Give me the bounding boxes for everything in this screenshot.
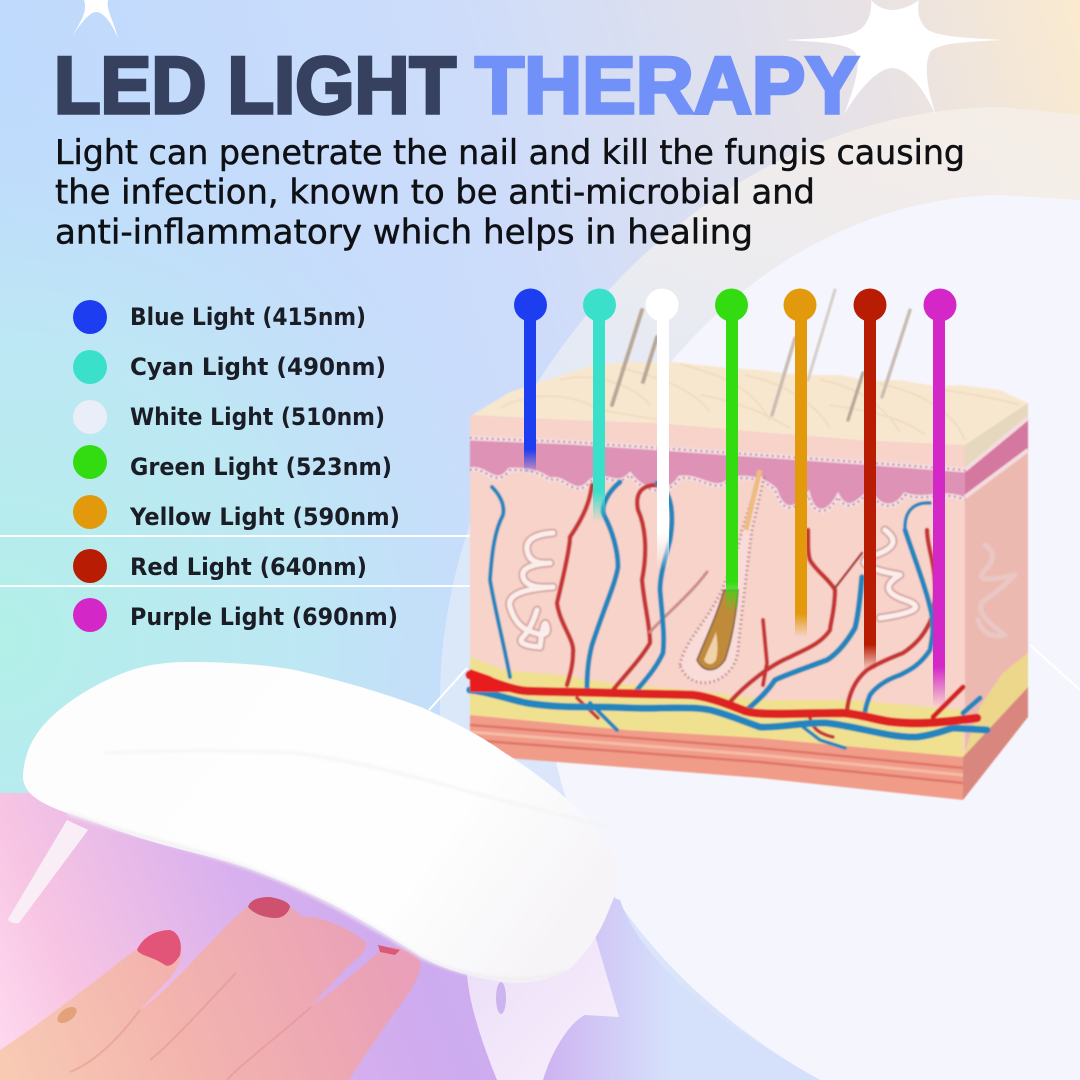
skin cross-section diagram: [470, 290, 1028, 800]
pin: blue: [514, 288, 547, 473]
hand fingers: [0, 903, 421, 1080]
legend item: white: [73, 400, 385, 434]
title: dark part: LED LIGHT: [54, 41, 456, 131]
skin surface: [472, 362, 1028, 470]
pink epidermis band: [470, 438, 965, 511]
title: blue part: THERAPY: [475, 41, 859, 131]
finger shading: [70, 973, 311, 1080]
knuckle spot: [55, 1004, 79, 1026]
side fat: [963, 653, 1028, 757]
red blood vessels: [557, 485, 963, 737]
legend item: cyan: Cyan Light (490nm): [130, 353, 386, 381]
blue blood vessels: [470, 482, 987, 748]
legend: light wavelengths: [73, 300, 400, 632]
lamp front stand: [467, 915, 619, 1080]
legend item: purple: [73, 598, 398, 632]
stand hole: [496, 982, 506, 1014]
legend item: green: [73, 445, 392, 481]
description text: anti-inflammatory which helps in healing: [55, 212, 753, 252]
side muscle: [963, 687, 1028, 800]
legend item: green: Green Light (523nm): [130, 453, 392, 481]
main red artery: [470, 675, 977, 723]
nail: index: [137, 930, 181, 966]
pin: yellow: [784, 288, 816, 637]
sparkle: top right: [785, 0, 1002, 118]
legend item: yellow: Yellow Light (590nm): [129, 503, 400, 531]
hairs: [612, 290, 910, 420]
title: [54, 41, 859, 131]
pin: red: [854, 288, 886, 670]
legend item: blue: Blue Light (415nm): [130, 303, 366, 331]
side face: [965, 418, 1028, 757]
legend item: yellow: [73, 495, 400, 531]
dermis front: [470, 415, 965, 760]
pin: white: [646, 288, 678, 570]
lamp lower edge shade: [67, 813, 568, 980]
legend item: red: Red Light (640nm): [130, 553, 367, 581]
legend item: white: White Light (510nm): [130, 403, 385, 431]
pin: green: [715, 288, 748, 613]
nail lamp and hand: [0, 662, 619, 1080]
legend item: red: [73, 549, 367, 583]
description text: the infection, known to be anti-microbial and: [55, 172, 815, 212]
description text: Light can penetrate the nail and kill the fungis causing: [55, 133, 965, 173]
light probes: colored pins: [514, 288, 956, 707]
pin: cyan: [583, 288, 616, 522]
nail: middle: [248, 897, 290, 918]
surface cobbles: [500, 364, 1020, 440]
sparkle: top left: [73, 0, 118, 38]
hair follicle: [680, 470, 764, 683]
lamp body: [23, 662, 617, 983]
description text: [55, 133, 965, 252]
fat layer: [470, 657, 963, 757]
hand: [0, 897, 421, 1080]
nail: ring: [378, 945, 400, 955]
legend item: blue: [73, 300, 366, 334]
muscle layer: [470, 715, 963, 800]
legend item: purple: Purple Light (690nm): [130, 603, 398, 631]
legend item: cyan: [73, 350, 386, 384]
pin: purple: [924, 288, 956, 707]
lamp crease: [105, 751, 606, 827]
glands: [510, 530, 1015, 647]
lamp rear stand: [8, 820, 88, 923]
